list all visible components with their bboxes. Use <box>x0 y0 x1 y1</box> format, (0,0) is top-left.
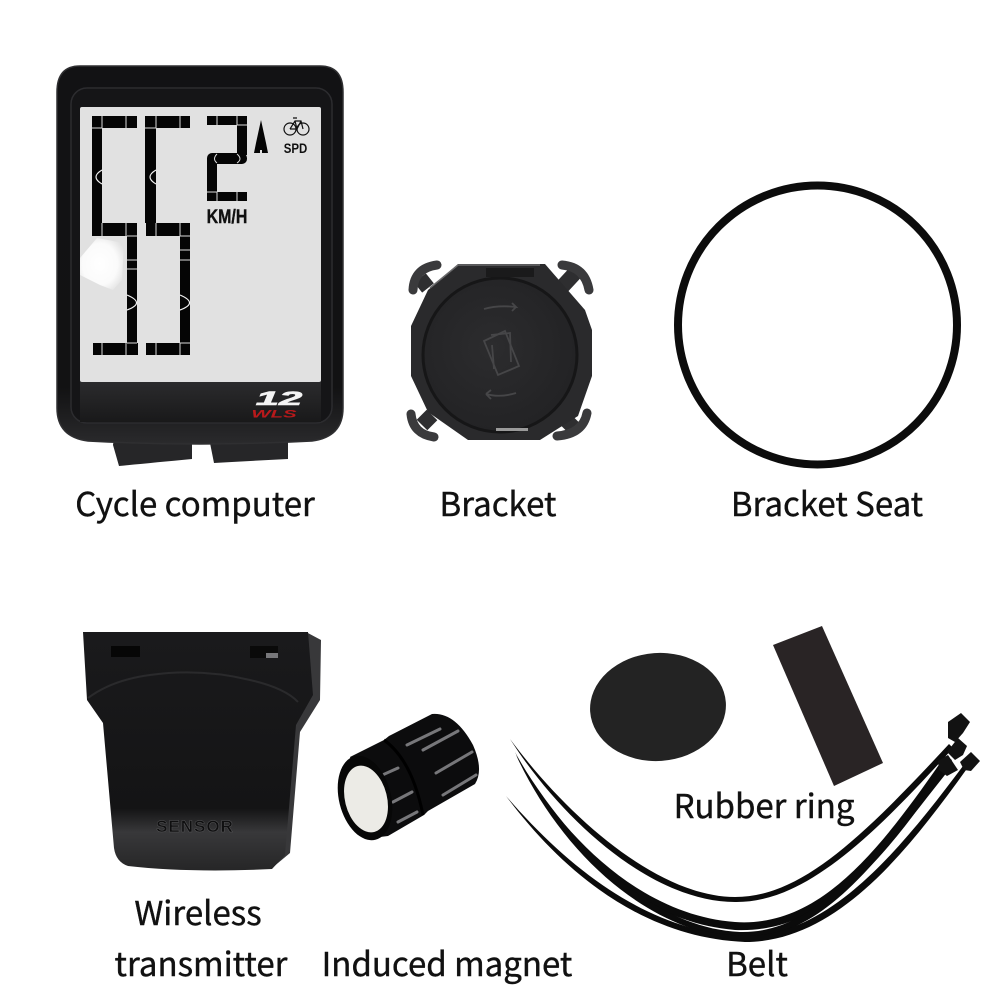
collar line <box>384 740 423 815</box>
right slot <box>250 646 278 658</box>
small digit <box>207 116 247 201</box>
left slot <box>111 646 140 657</box>
ribs <box>378 729 476 822</box>
bottom notch <box>496 428 528 431</box>
embossed SENSOR: SENSOR <box>156 817 234 836</box>
magnet face <box>337 761 395 837</box>
LCD screen <box>80 107 321 382</box>
logo: 12: 12 <box>256 388 302 409</box>
arrow indicator <box>254 120 268 153</box>
label: induced magnet: Induced magnet <box>322 938 572 986</box>
bracket prongs <box>411 265 589 437</box>
transmitter body <box>83 632 313 870</box>
bracket seat ring <box>678 186 957 464</box>
label: cycle computer: Cycle computer <box>75 478 315 526</box>
tie 1 <box>510 739 953 902</box>
speed digits <box>92 116 247 355</box>
panel: induced magnet <box>329 714 479 846</box>
tie heads <box>938 713 980 776</box>
screen glare <box>80 238 124 290</box>
unit KM/H: KM/H <box>207 206 247 227</box>
device buttons <box>113 439 288 466</box>
rectangular pad <box>773 626 883 786</box>
label: rubber ring: Rubber ring <box>674 780 855 828</box>
embossed marks <box>484 303 519 399</box>
label: belt: Belt <box>726 938 788 986</box>
lower band <box>80 380 321 422</box>
label: wireless: Wireless <box>134 887 262 935</box>
label: bracket: Bracket <box>440 478 556 526</box>
panel: bracket <box>411 264 592 440</box>
icon: bicycle <box>284 118 309 135</box>
panel: cycle computer <box>57 66 343 466</box>
panel: wireless transmitter <box>83 632 321 870</box>
panel: cable ties <box>506 713 980 942</box>
segment gaps <box>92 116 247 355</box>
tie 2 <box>515 752 952 930</box>
magnet front rim <box>329 750 401 846</box>
inner bezel <box>71 88 332 423</box>
digit 1 <box>92 116 138 355</box>
panel: rubber pads <box>586 626 883 786</box>
label: bracket seat: Bracket Seat <box>731 478 923 526</box>
device body <box>57 66 343 444</box>
rim highlight <box>430 265 540 288</box>
digit 2 <box>145 116 190 355</box>
label: transmitter: transmitter <box>115 938 288 986</box>
bracket dial <box>423 278 577 432</box>
round foam pad <box>586 648 730 766</box>
contour highlight <box>88 672 298 702</box>
tie 3 <box>516 755 952 938</box>
top notch <box>486 268 534 277</box>
bracket body <box>411 264 592 440</box>
tie 4 <box>506 766 966 942</box>
side edge <box>272 632 321 868</box>
right slot detail <box>266 653 278 658</box>
mode SPD: SPD <box>284 141 307 156</box>
logo: WLS: WLS <box>251 408 297 420</box>
magnet barrel <box>350 714 479 838</box>
